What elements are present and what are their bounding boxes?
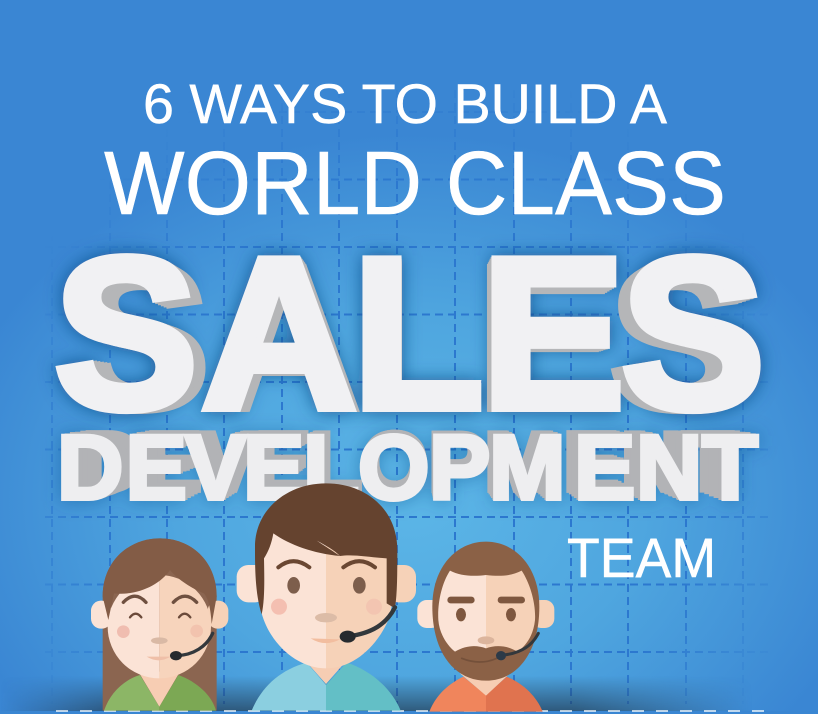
title word: SALES in 3D: SALES: [54, 212, 765, 454]
title word: SALES in 3D: SALES: [62, 217, 757, 453]
title line: world class: WORLD CLASS: [104, 134, 726, 234]
character: bearded man with headset: [417, 542, 554, 712]
title word: DEVELOPMENT in 3D: DEVELOPMENT: [61, 417, 755, 518]
title word: SALES in 3D: SALES: [74, 224, 746, 452]
bottom band and dashed seam: [0, 711, 818, 714]
title word: DEVELOPMENT in 3D: DEVELOPMENT: [66, 416, 749, 516]
title word: DEVELOPMENT in 3D: DEVELOPMENT: [57, 417, 758, 519]
title word: DEVELOPMENT in 3D: DEVELOPMENT: [82, 415, 734, 510]
title word: team: TEAM: [567, 526, 716, 589]
blueprint grid: [45, 90, 770, 704]
title line: 6 ways to build a: 6 WAYS TO BUILD A: [143, 72, 668, 135]
title word: SALES in 3D: SALES: [66, 220, 753, 453]
title word: DEVELOPMENT in 3D: DEVELOPMENT: [71, 414, 744, 513]
title word: DEVELOPMENT in 3D: DEVELOPMENT: [76, 415, 739, 512]
title word: DEVELOPMENT in 3D: DEVELOPMENT: [57, 417, 758, 519]
title word: SALES in 3D: SALES: [58, 216, 761, 454]
title word: SALES in 3D: SALES: [54, 212, 765, 454]
title word: SALES in 3D: SALES: [70, 221, 749, 452]
bottom shadow band: [10, 679, 736, 711]
character: woman with headset: [91, 538, 228, 711]
character: man with headset: [237, 483, 416, 711]
